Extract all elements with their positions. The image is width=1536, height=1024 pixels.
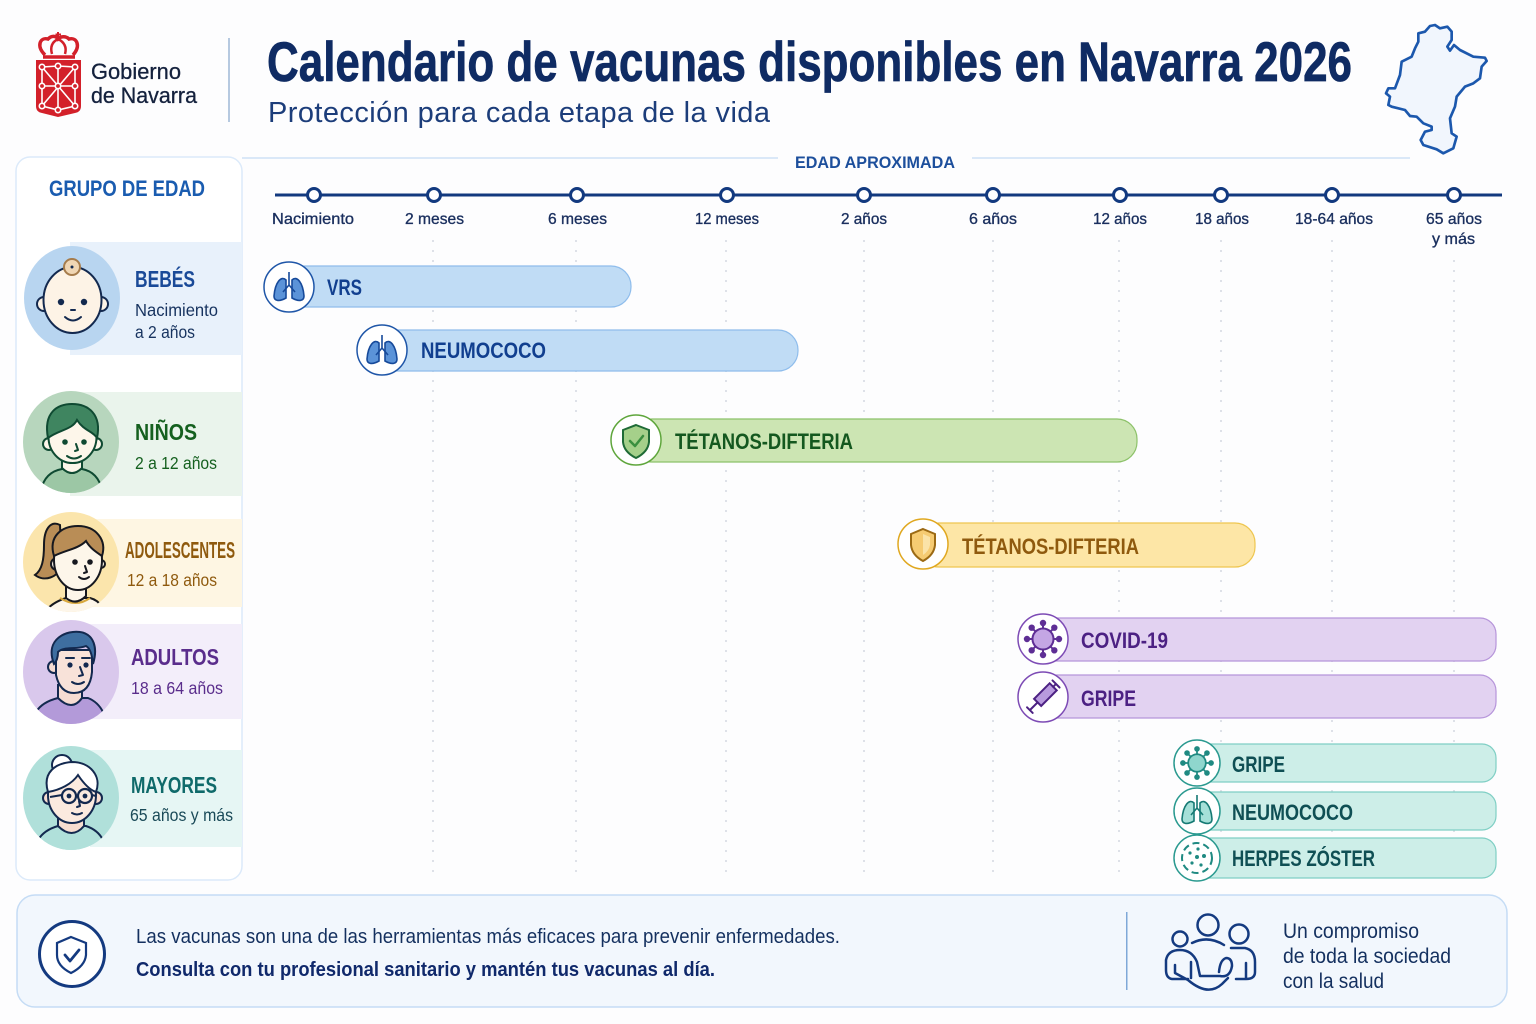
age labels	[272, 211, 1482, 248]
icon: community	[1166, 914, 1255, 990]
group: niños	[23, 391, 242, 500]
age labels: 65 años	[1426, 211, 1482, 228]
group text: a 2 años	[135, 322, 195, 342]
age labels: y más	[1432, 231, 1475, 248]
logo text: Gobierno	[91, 59, 181, 84]
group text: BEBÉS	[135, 265, 195, 292]
age labels: Nacimiento	[272, 211, 354, 228]
group text: ADOLESCENTES	[125, 537, 235, 563]
icon: crown	[40, 32, 77, 57]
icon: senior face	[38, 755, 103, 855]
heading: age group: GRUPO DE EDAD	[49, 176, 205, 201]
icon: yellow shield	[911, 529, 935, 561]
icon: teenager face	[35, 524, 105, 620]
bar: Neumococo mayores: NEUMOCOCO	[1232, 800, 1353, 825]
group: adolescentes	[23, 512, 242, 620]
group: mayores	[23, 746, 242, 855]
age labels: 12 años	[1093, 211, 1147, 228]
age labels: 12 meses	[695, 211, 759, 228]
group: adultos	[23, 620, 242, 730]
group text: 18 a 64 años	[131, 678, 223, 698]
bar: VRS: VRS	[327, 275, 362, 300]
logo text	[91, 59, 198, 108]
bar: Neumococo bebés	[357, 325, 798, 375]
group text	[135, 265, 218, 342]
icon: map of Navarra	[1386, 25, 1487, 153]
footer message	[136, 926, 840, 981]
bar: Tétanos-difteria adolescentes: TÉTANOS-DIFTERIA	[962, 534, 1139, 559]
icon: flu virus	[1181, 747, 1213, 779]
bar: VRS	[264, 262, 631, 312]
icon: adult face	[36, 632, 103, 730]
bar: Tétanos-difteria niños: TÉTANOS-DIFTERIA	[675, 429, 853, 454]
bar: Tétanos-difteria niños	[611, 415, 1137, 465]
bar: Neumococo bebés: NEUMOCOCO	[421, 338, 546, 363]
age labels: 18-64 años	[1295, 211, 1373, 228]
bar: Herpes zóster mayores	[1174, 835, 1496, 881]
icon: syringe	[1026, 680, 1060, 714]
logo text: de Navarra	[91, 83, 198, 108]
age labels: 18 años	[1195, 211, 1249, 228]
footer slogan	[1283, 920, 1451, 993]
timeline heading: EDAD APROXIMADA	[795, 153, 955, 172]
bar: COVID-19 adultos	[1018, 614, 1496, 664]
group: bebés	[24, 242, 242, 355]
group text: 2 a 12 años	[135, 453, 217, 473]
icon: herpes	[1182, 843, 1212, 873]
group text: Nacimiento	[135, 300, 218, 320]
bar: Herpes zóster mayores: HERPES ZÓSTER	[1232, 846, 1375, 871]
bar: COVID-19 adultos: COVID-19	[1081, 628, 1168, 653]
icon: green shield	[623, 425, 649, 458]
bar: Neumococo mayores	[1174, 788, 1496, 834]
group text	[130, 772, 233, 825]
bar: Gripe mayores: GRIPE	[1232, 752, 1285, 777]
bar: Gripe adultos	[1018, 672, 1496, 722]
footer slogan: Un compromiso	[1283, 920, 1419, 943]
group text	[131, 644, 223, 698]
age labels: 6 años	[969, 211, 1017, 228]
footer message: Las vacunas son una de las herramientas más eficaces para prevenir enfermedades.	[136, 926, 840, 948]
subtitle: Protección para cada etapa de la vida	[268, 97, 771, 129]
age labels: 6 meses	[548, 211, 607, 228]
age labels: 2 meses	[405, 211, 464, 228]
group text: MAYORES	[131, 772, 217, 798]
logo: Gobierno de Navarra	[36, 32, 198, 117]
group text	[135, 418, 217, 473]
footer slogan: de toda la sociedad	[1283, 945, 1451, 968]
group text: 65 años y más	[130, 805, 233, 825]
group text: 12 a 18 años	[127, 570, 217, 590]
panel: footer	[17, 895, 1507, 1007]
group text	[125, 537, 235, 590]
age labels: 2 años	[841, 211, 887, 228]
bar: Gripe mayores	[1174, 740, 1496, 786]
panel: age groups	[16, 157, 242, 880]
icon: virus	[1025, 621, 1061, 657]
icon: child face	[41, 404, 102, 500]
icon: red shield	[36, 60, 81, 117]
timeline axis	[272, 188, 1502, 248]
icon: baby face	[37, 259, 108, 333]
footer slogan: con la salud	[1283, 970, 1384, 993]
bar: Tétanos-difteria adolescentes	[898, 519, 1255, 569]
footer message: Consulta con tu profesional sanitario y mantén tus vacunas al día.	[136, 959, 715, 981]
group text: NIÑOS	[135, 418, 197, 445]
icon: shield with check	[40, 922, 104, 986]
group text: ADULTOS	[131, 644, 219, 670]
bar: Gripe adultos: GRIPE	[1081, 686, 1136, 711]
